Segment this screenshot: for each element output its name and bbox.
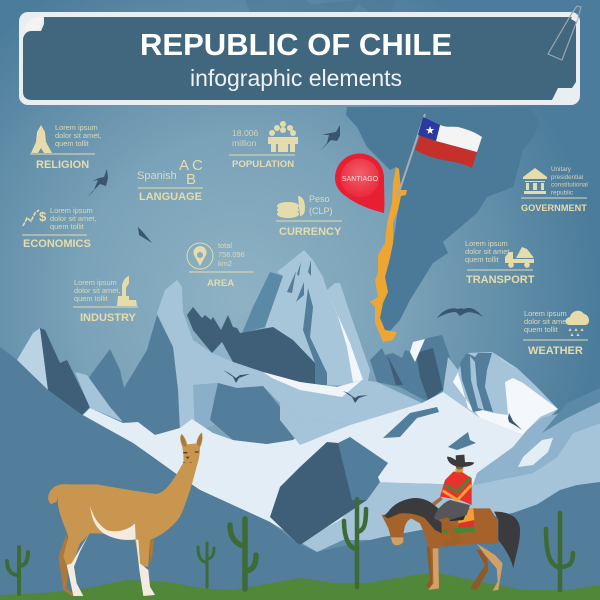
economics text: dolor sit amet, xyxy=(50,214,96,223)
ABC glyphs: B xyxy=(186,171,196,188)
near front leg xyxy=(428,546,439,590)
light ledge xyxy=(193,340,422,425)
transport label: TRANSPORT xyxy=(466,274,535,286)
poncho stripe yellow xyxy=(443,485,471,500)
flag pole xyxy=(398,114,425,195)
population figure: million xyxy=(232,138,257,148)
belly xyxy=(90,506,136,540)
ABC glyphs: C xyxy=(192,157,203,174)
near hind leg xyxy=(477,543,503,591)
bird 7 xyxy=(508,413,522,430)
industry text: Lorem ipsum xyxy=(74,278,117,287)
birds xyxy=(87,125,522,430)
truck icon xyxy=(505,247,534,268)
pin shape xyxy=(335,154,384,213)
right white snow xyxy=(453,372,558,435)
area label: AREA xyxy=(207,278,234,289)
currency text: Peso xyxy=(309,194,330,204)
bird 5 xyxy=(223,370,250,383)
ledge shade xyxy=(193,383,218,433)
area text: 756.096 xyxy=(218,250,245,259)
weather text: quem tollit xyxy=(524,325,558,334)
blanket trim xyxy=(458,520,475,529)
bird 1 xyxy=(87,169,108,197)
blanket xyxy=(458,508,475,530)
economics label: ECONOMICS xyxy=(23,238,91,250)
bird 4 xyxy=(437,308,483,318)
rear wheel xyxy=(524,262,530,268)
cloud icon xyxy=(566,311,589,325)
peak stripe xyxy=(287,260,327,385)
muzzle xyxy=(391,537,403,545)
currency label: CURRENCY xyxy=(279,226,342,238)
far front leg shade xyxy=(150,539,154,563)
language label: LANGUAGE xyxy=(139,191,202,203)
currency xyxy=(276,194,342,238)
hat xyxy=(447,455,474,467)
industry text: dolor sit amet, xyxy=(74,286,120,295)
central cluster xyxy=(370,335,450,402)
page curl left xyxy=(24,17,42,31)
government label: GOVERNMENT xyxy=(521,203,587,213)
far hind leg xyxy=(58,533,75,596)
white band xyxy=(263,372,362,397)
language name: Spanish xyxy=(137,170,177,182)
area rule xyxy=(189,271,254,273)
banner border xyxy=(19,12,580,105)
economics text: quem tollit xyxy=(50,222,84,231)
far mountains xyxy=(17,250,558,440)
transport text: quem tollit xyxy=(465,255,499,264)
area text: km2 xyxy=(218,259,232,268)
industry label: INDUSTRY xyxy=(80,312,136,324)
big central peak xyxy=(265,250,370,386)
pin label: SANTIAGO xyxy=(342,176,379,183)
population icon xyxy=(268,121,298,152)
religion xyxy=(30,123,101,171)
head xyxy=(455,460,464,471)
area icon ring xyxy=(187,243,213,269)
economics rule xyxy=(22,234,87,236)
language xyxy=(137,157,203,203)
saddle xyxy=(442,505,470,522)
boot xyxy=(439,517,460,547)
star: ★ xyxy=(425,125,435,137)
religion rule xyxy=(30,153,95,155)
religion text: dolor sit amet, xyxy=(55,131,101,140)
government xyxy=(521,166,588,213)
bird 6 xyxy=(343,391,368,403)
religion text: Lorem ipsum xyxy=(55,123,98,132)
left light peak xyxy=(157,280,195,435)
hat brim xyxy=(447,457,474,467)
foreground slopes xyxy=(0,347,600,600)
government text: republic xyxy=(551,190,573,196)
guanaco xyxy=(48,433,202,596)
truck load xyxy=(516,247,534,258)
map: South America xyxy=(245,0,540,340)
left white peak xyxy=(17,328,48,390)
tail xyxy=(494,512,520,568)
blanket hem xyxy=(443,527,475,534)
population rule xyxy=(229,154,295,156)
bird 3 xyxy=(320,125,340,151)
light band xyxy=(280,403,350,445)
right ridge shade xyxy=(460,353,493,412)
area text: total xyxy=(218,241,232,250)
cactus 1 xyxy=(7,547,28,594)
cluster white cap xyxy=(410,339,425,362)
rear white leg xyxy=(67,533,89,596)
transport text: Lorem ipsum xyxy=(465,239,508,248)
snowfield xyxy=(83,383,600,552)
population label: POPULATION xyxy=(232,159,294,170)
banner xyxy=(19,6,581,105)
weather rule xyxy=(523,339,588,341)
cactus 2 xyxy=(198,543,214,587)
cacti xyxy=(7,499,573,594)
front white leg xyxy=(136,539,155,596)
weather xyxy=(523,309,589,357)
blue canton xyxy=(418,117,440,141)
blue outcrop xyxy=(210,383,300,444)
white cap xyxy=(493,352,517,370)
white ridge xyxy=(327,292,363,382)
horse and rider xyxy=(382,455,520,591)
body xyxy=(48,433,202,567)
cactus 3 xyxy=(230,519,256,589)
white stripe xyxy=(436,125,482,152)
wheels xyxy=(508,262,514,268)
government text: Unitary xyxy=(551,166,572,173)
body xyxy=(382,502,498,547)
right light slope xyxy=(300,423,600,552)
government text: constitutional xyxy=(551,182,588,188)
ABC glyphs: A xyxy=(179,157,189,174)
snow xyxy=(83,392,560,540)
population xyxy=(229,121,298,170)
transport text: dolor sit amet, xyxy=(465,247,511,256)
government text: presidential xyxy=(551,174,583,181)
left dark mountain xyxy=(40,328,90,415)
collar xyxy=(455,469,463,472)
industry icon xyxy=(117,276,137,306)
right light peak xyxy=(443,352,558,440)
red stripe xyxy=(415,135,477,168)
blue facet xyxy=(338,437,388,500)
language rule xyxy=(138,187,203,189)
face xyxy=(183,451,199,463)
government rule xyxy=(521,197,587,199)
Chile map xyxy=(370,167,407,342)
pin: Santiago xyxy=(335,154,384,213)
mane xyxy=(384,498,442,533)
religion label: RELIGION xyxy=(36,159,89,171)
weather text: Lorem ipsum xyxy=(524,309,567,318)
transport xyxy=(465,239,535,286)
subtitle: infographic elements xyxy=(190,65,402,91)
cluster shade xyxy=(387,348,443,400)
currency rule xyxy=(276,220,342,222)
flag xyxy=(398,114,482,195)
pin circle xyxy=(340,158,380,198)
far hind leg xyxy=(470,550,488,590)
currency text: (CLP) xyxy=(309,206,333,216)
economics xyxy=(22,206,96,250)
white blob xyxy=(518,438,553,467)
left light stripe xyxy=(75,372,123,422)
poncho stripe green xyxy=(445,477,471,492)
religion icon xyxy=(31,125,52,153)
rain drops xyxy=(568,328,584,336)
economics text: Lorem ipsum xyxy=(50,206,93,215)
area xyxy=(187,241,254,289)
paper clip xyxy=(548,6,581,60)
ridge light stripe xyxy=(470,356,484,410)
right far band xyxy=(473,402,600,485)
dark foreground mountain xyxy=(270,442,367,545)
far front leg xyxy=(425,547,435,588)
economics icon xyxy=(23,210,39,226)
thigh xyxy=(434,500,470,522)
snow patch blue 1 xyxy=(383,407,439,438)
bird 2 xyxy=(138,227,152,243)
industry text: quem tollit xyxy=(74,294,108,303)
hat crown xyxy=(456,455,465,463)
truck body xyxy=(505,252,534,263)
dark ridge xyxy=(187,307,315,385)
green ground xyxy=(0,572,600,600)
population figure: 18.006 xyxy=(232,128,259,138)
left mid-blue mountain xyxy=(87,315,180,435)
government icon xyxy=(523,168,547,194)
snow patch blue 2 xyxy=(448,432,476,450)
ear shade xyxy=(181,433,202,447)
moustache xyxy=(456,464,463,466)
area icon pin xyxy=(194,246,207,266)
shaded facet of peak xyxy=(242,272,283,333)
arm xyxy=(432,497,443,506)
banner panel xyxy=(23,17,576,100)
cactus 5 xyxy=(546,513,573,590)
coins icon xyxy=(277,196,305,218)
front leg light xyxy=(428,548,439,590)
left slope xyxy=(0,347,600,600)
weather text: dolor sit amet, xyxy=(524,317,570,326)
religion text: quem tollit xyxy=(55,139,89,148)
right dark ridge xyxy=(542,388,600,433)
small light facet xyxy=(212,342,233,362)
title: REPUBLIC OF CHILE xyxy=(140,27,452,62)
industry xyxy=(73,276,138,324)
industry rule xyxy=(73,306,138,308)
poncho xyxy=(440,472,472,505)
weather label: WEATHER xyxy=(528,345,583,357)
cactus 4 xyxy=(344,499,366,587)
transport rule xyxy=(467,269,533,271)
dollar sign: $ xyxy=(39,209,47,224)
